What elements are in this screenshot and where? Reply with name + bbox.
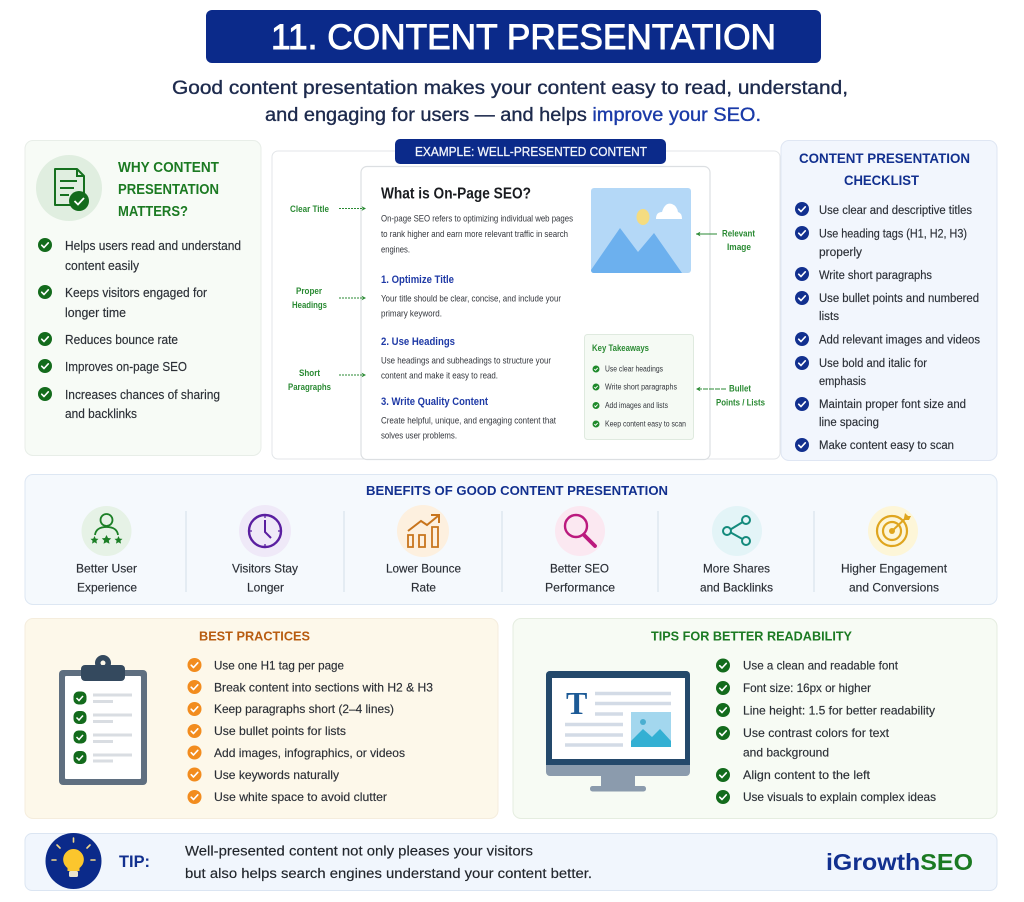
subtitle: and engaging for users — and helps improve your SEO. <box>265 105 761 126</box>
benefit: better user experience <box>76 506 137 594</box>
checklist items: Maintain proper font size and <box>819 399 966 411</box>
list: best practices: Use keywords naturally <box>214 768 339 782</box>
panel: benefits <box>25 474 997 604</box>
checklist items: Write short paragraphs <box>819 270 932 282</box>
list: readability tips: Font size: 16px or higher <box>743 681 871 695</box>
icon: lightbulb <box>46 833 102 889</box>
icon: clipboard <box>59 655 147 785</box>
section 1: Your title should be clear, concise, and include your <box>381 294 561 304</box>
benefit: better user experience: Experience <box>77 580 137 594</box>
heading: WHY CONTENT <box>118 160 219 176</box>
benefit: higher engagement: and Conversions <box>849 580 939 594</box>
list: reasons: Increases chances of sharing <box>65 388 220 402</box>
panel: tips for better readability <box>513 618 997 818</box>
benefit: more shares and backlinks: and Backlinks <box>700 580 773 594</box>
panel: best practices <box>25 618 498 818</box>
annotation: clear title <box>290 204 366 214</box>
section 2: Use headings and subheadings to structure your <box>381 356 551 366</box>
list: best practices: Use bullet points for lists <box>214 724 346 738</box>
benefit: higher engagement: Higher Engagement <box>841 562 948 576</box>
key takeaways box: Add images and lists <box>605 401 668 410</box>
annotation: proper headings: Headings <box>292 300 327 310</box>
annotation: bullet points <box>696 384 765 408</box>
panel: tip bar <box>25 833 997 890</box>
list: reasons: Reduces bounce rate <box>65 333 178 347</box>
checklist items: Use bullet points and numbered <box>819 293 979 305</box>
benefit: more shares and backlinks <box>700 506 773 594</box>
heading: MATTERS? <box>118 204 188 220</box>
intro paragraph: On-page SEO refers to optimizing individual web pages <box>381 214 573 224</box>
list: reasons <box>38 238 241 421</box>
list: readability tips: Use visuals to explain complex ideas <box>743 790 936 804</box>
intro paragraph: to rank higher and earn more relevant traffic in search <box>381 229 568 239</box>
annotation: short paragraphs <box>288 368 366 392</box>
list: reasons: Helps users read and understand <box>65 239 241 253</box>
benefit: better seo performance <box>545 506 615 594</box>
benefit: visitors stay longer: Visitors Stay <box>232 562 298 576</box>
section 3 <box>381 396 556 440</box>
section 2: content and make it easy to read. <box>381 370 498 380</box>
annotation: proper headings <box>292 286 366 310</box>
checklist items: line spacing <box>819 417 879 429</box>
icon: document with check <box>36 155 102 221</box>
benefit: lower bounce rate: Lower Bounce <box>386 562 461 576</box>
annotation: relevant image: Image <box>727 242 751 252</box>
annotation: clear title: Clear Title <box>290 204 329 214</box>
list: reasons: Keeps visitors engaged for <box>65 286 207 300</box>
list: reasons: and backlinks <box>65 407 137 421</box>
heading: BEST PRACTICES <box>199 628 310 644</box>
icon: monitor <box>546 671 690 792</box>
list: best practices: Keep paragraphs short (2–4 lines) <box>214 702 394 716</box>
list: best practices: Add images, infographics, or videos <box>214 746 405 760</box>
intro paragraph <box>381 214 573 254</box>
panel: content presentation checklist <box>781 140 997 460</box>
article title: What is On-Page SEO? <box>381 186 531 202</box>
key takeaways box: Keep content easy to scan <box>605 420 686 428</box>
benefit: better seo performance: Better SEO <box>550 562 609 576</box>
checklist items: Make content easy to scan <box>819 440 954 452</box>
benefit: visitors stay longer: Longer <box>247 580 284 594</box>
checklist items: emphasis <box>819 376 866 388</box>
checklist items: Use bold and italic for <box>819 358 927 370</box>
logo: iGrowthSEO: iGrowth SEO <box>826 849 973 875</box>
annotation: relevant image: Relevant <box>722 228 755 238</box>
panel: example outer frame <box>272 151 780 459</box>
checklist items: lists <box>819 311 839 323</box>
annotation: proper headings: Proper <box>296 286 322 296</box>
checklist items: Add relevant images and videos <box>819 334 980 346</box>
benefit: visitors stay longer <box>232 505 298 594</box>
section 1: primary keyword. <box>381 308 442 318</box>
benefit: more shares and backlinks: More Shares <box>703 562 770 576</box>
annotation: bullet points: Points / Lists <box>716 398 765 408</box>
heading: CONTENT PRESENTATION <box>799 150 970 166</box>
example label pill <box>395 139 666 164</box>
section 3: 3. Write Quality Content <box>381 396 488 408</box>
benefit: higher engagement <box>841 506 948 594</box>
example label pill: EXAMPLE: WELL-PRESENTED CONTENT <box>415 145 647 159</box>
key takeaways box <box>584 334 694 440</box>
list: reasons: Improves on-page SEO <box>65 360 187 374</box>
icon: monitor: T <box>566 685 587 721</box>
section 1 <box>381 274 561 318</box>
benefit: lower bounce rate <box>386 505 461 594</box>
section 2: 2. Use Headings <box>381 336 455 348</box>
image placeholder <box>591 188 691 273</box>
heading: TIPS FOR BETTER READABILITY <box>651 628 852 644</box>
list: best practices: Use one H1 tag per page <box>214 658 344 672</box>
panel: why content presentation matters <box>25 140 261 456</box>
checklist items: Use clear and descriptive titles <box>819 205 972 217</box>
list: readability tips: and background <box>743 746 829 760</box>
benefit: better seo performance: Performance <box>545 580 615 594</box>
annotation: short paragraphs: Short <box>299 368 320 378</box>
key takeaways box: Write short paragraphs <box>605 382 677 392</box>
intro paragraph: engines. <box>381 244 410 254</box>
list: best practices: Use white space to avoid clutter <box>214 790 387 804</box>
list: readability tips: Use contrast colors for text <box>743 726 890 740</box>
tip text: Well-presented content not only pleases your visitors <box>185 844 533 858</box>
key takeaways box: Key Takeaways <box>592 343 649 353</box>
key takeaways box: Use clear headings <box>605 364 663 374</box>
annotation: bullet points: Bullet <box>729 384 751 394</box>
heading: PRESENTATION <box>118 182 219 198</box>
section 2 <box>381 336 551 380</box>
benefit: better user experience: Better User <box>76 562 137 576</box>
list: best practices: Break content into sections with H2 & H3 <box>214 680 433 694</box>
list: reasons: longer time <box>65 306 126 320</box>
checklist items: properly <box>819 247 862 259</box>
list: reasons: content easily <box>65 259 140 273</box>
heading: BENEFITS OF GOOD CONTENT PRESENTATION <box>366 483 668 498</box>
benefit: lower bounce rate: Rate <box>411 580 436 594</box>
tip text <box>185 844 592 881</box>
checklist items: Use heading tags (H1, H2, H3) <box>819 228 967 240</box>
list: readability tips <box>716 658 936 804</box>
tip text: but also helps search engines understand your content better. <box>185 866 592 881</box>
section 3: solves user problems. <box>381 430 457 440</box>
heading: CHECKLIST <box>844 172 919 188</box>
title banner <box>206 10 821 63</box>
list: readability tips: Line height: 1.5 for better readability <box>743 704 935 718</box>
tip label: TIP: <box>119 852 150 871</box>
section 3: Create helpful, unique, and engaging content that <box>381 416 556 426</box>
heading <box>118 160 219 220</box>
section 1: 1. Optimize Title <box>381 274 454 286</box>
annotation: short paragraphs: Paragraphs <box>288 382 331 392</box>
title banner: 11. CONTENT PRESENTATION <box>271 18 776 57</box>
list: readability tips: Use a clean and readable font <box>743 658 899 672</box>
checklist items <box>795 202 980 452</box>
subtitle: Good content presentation makes your content easy to read, understand, <box>172 78 848 99</box>
subtitle <box>172 78 848 126</box>
list: best practices <box>188 658 433 804</box>
annotation: relevant image <box>696 228 755 252</box>
example article card <box>361 166 710 460</box>
heading <box>799 150 970 188</box>
list: readability tips: Align content to the left <box>743 768 871 782</box>
